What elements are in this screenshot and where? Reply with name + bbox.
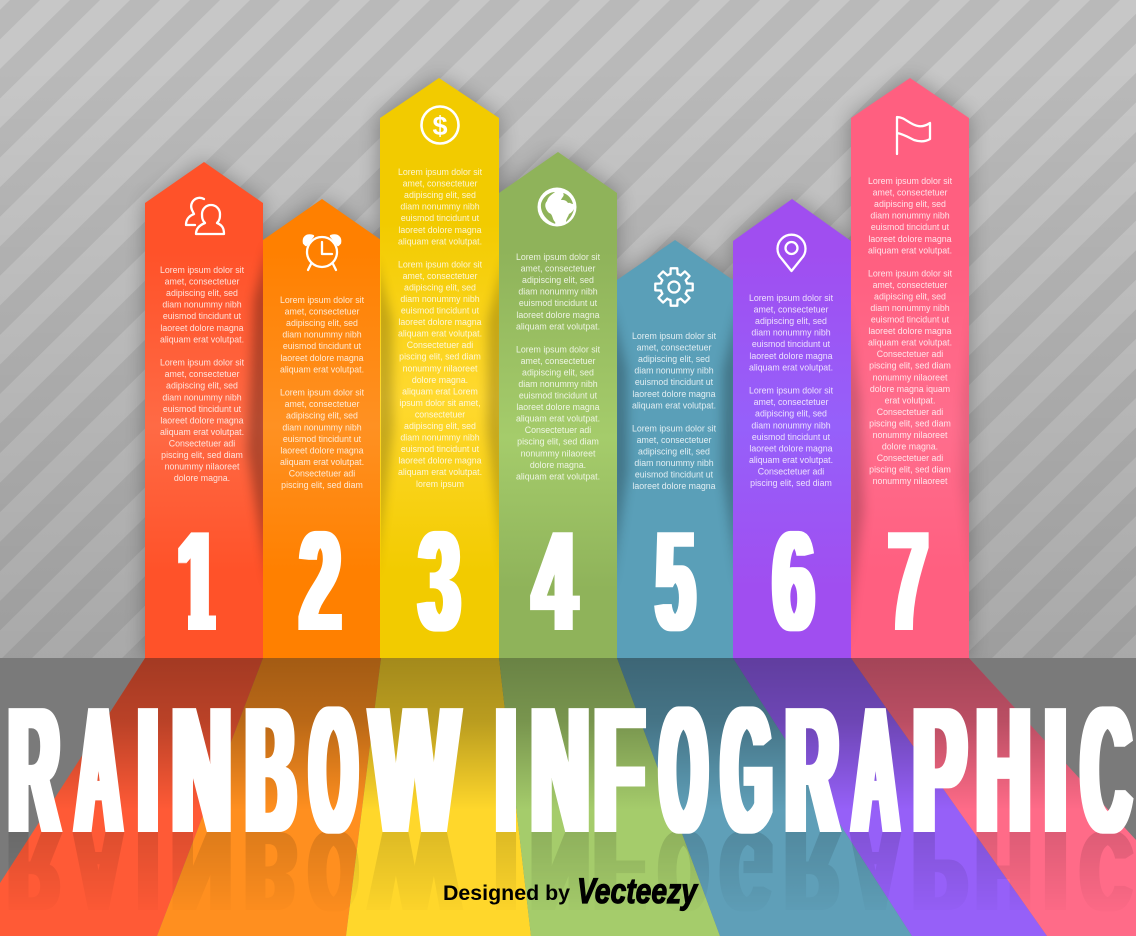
column 6 text: diam nonummy nibh	[751, 420, 831, 430]
column 1 text: aliquam erat volutpat.	[160, 427, 244, 437]
column 7 text: amet, consectetuer	[873, 188, 947, 198]
column 7 text: piscing elit, sed diam	[869, 418, 951, 428]
column 4 text: amet, consectetuer	[521, 356, 595, 366]
icon: flag	[897, 117, 930, 154]
column 6 text: aliquam erat volutpat.	[749, 455, 833, 465]
column 3 text: diam nonummy nibh	[400, 294, 480, 304]
title reflection: N	[172, 808, 231, 935]
striped grey background	[0, 0, 1136, 658]
icon: globe	[538, 188, 576, 226]
column 3 shape	[380, 78, 499, 658]
column 6 text: piscing elit, sed diam	[750, 478, 832, 488]
soft shadow behind columns	[145, 78, 969, 658]
title: H	[977, 670, 1030, 871]
column 6 text: aliquam erat volutpat.	[749, 362, 833, 372]
title: A	[76, 669, 121, 871]
column 1 text: amet, consectetuer	[165, 277, 239, 287]
column 2 text: adipiscing elit, sed	[286, 411, 358, 421]
title reflection: P	[913, 808, 966, 934]
column 5 text: adipiscing elit, sed	[638, 446, 710, 456]
column 7 text: nonummy nilaoreet	[873, 372, 948, 382]
column 1 text: amet, consectetuer	[165, 369, 239, 379]
title: O	[660, 671, 707, 871]
title reflection: G	[722, 807, 772, 934]
title: G	[722, 669, 772, 871]
column 6 text: Lorem ipsum dolor sit	[749, 293, 834, 303]
column 2 text: Lorem ipsum dolor sit	[280, 295, 365, 305]
column 7 text: Lorem ipsum dolor sit	[868, 268, 953, 278]
title reflection: A	[853, 807, 898, 934]
column 4 text: aliquam erat volutpat.	[516, 471, 600, 481]
credit line: Vecteezy	[577, 872, 698, 911]
column 3 text: euismod tincidunt ut	[401, 306, 480, 316]
title: O	[310, 671, 357, 871]
column 1 side shadow	[241, 250, 263, 574]
column 7: pink	[845, 78, 975, 658]
column numbers 1 to 7	[178, 530, 929, 632]
column 4 text: adipiscing elit, sed	[522, 367, 594, 377]
column numbers 1 to 7: 1	[177, 503, 219, 661]
column 7 text: Consectetuer adi	[877, 453, 943, 463]
column 1 text: dolore magna.	[174, 473, 230, 483]
column 2 text: Lorem ipsum dolor sit	[280, 388, 365, 398]
column 3 text: adipiscing elit, sed	[404, 282, 476, 292]
column 1 text: adipiscing elit, sed	[166, 381, 238, 391]
column 1 text: nonummy nilaoreet	[165, 462, 240, 472]
column 3 text: aliquam erat volutpat.	[398, 236, 482, 246]
column 1 text: aliquam erat volutpat.	[160, 334, 244, 344]
title reflection: F	[594, 808, 644, 935]
column 7 text: adipiscing elit, sed	[874, 291, 946, 301]
column 3 text: consectetuer	[415, 409, 465, 419]
column 5 text: diam nonummy nibh	[634, 366, 714, 376]
column 2 text: amet, consectetuer	[285, 399, 359, 409]
title reflection: C	[1082, 808, 1130, 934]
title reflection: A	[76, 807, 121, 934]
title reflection: I	[138, 808, 158, 934]
column numbers 1 to 7: 4	[533, 502, 577, 661]
column 2 text: euismod tincidunt ut	[283, 341, 362, 351]
title: I	[496, 669, 516, 870]
column 1 shape	[145, 162, 263, 658]
rainbow beams	[0, 658, 1136, 936]
column 3 text: aliquam erat Lorem	[402, 386, 478, 396]
column 7 text: dolore magna iquam	[870, 384, 950, 394]
column 5 text: adipiscing elit, sed	[638, 354, 710, 364]
column numbers 1 to 7: 2	[300, 502, 341, 660]
column 4 text: diam nonummy nibh	[518, 287, 598, 297]
column 5 text: Lorem ipsum dolor sit	[632, 331, 717, 341]
column 3 text: adipiscing elit, sed	[404, 190, 476, 200]
column 5: blue	[617, 240, 733, 658]
column 7 text: piscing elit, sed diam	[869, 465, 951, 475]
column 3 text: adipiscing elit, sed	[404, 421, 476, 431]
column 5 text: amet, consectetuer	[637, 343, 711, 353]
column 4 text: amet, consectetuer	[521, 264, 595, 274]
icon: people	[186, 198, 224, 234]
column 6 text: adipiscing elit, sed	[755, 316, 827, 326]
column 3 text: diam nonummy nibh	[400, 433, 480, 443]
column 3 side shadows	[381, 267, 499, 552]
column 6 text: adipiscing elit, sed	[755, 409, 827, 419]
column 6 text: Consectetuer adi	[758, 466, 824, 476]
icon: dollar coin: $	[432, 111, 448, 141]
column 4 text: piscing elit, sed diam	[517, 437, 599, 447]
column 6 shape	[733, 199, 851, 658]
column 3 text: nonummy nilaoreet	[403, 363, 478, 373]
column 4 text: euismod tincidunt ut	[519, 298, 598, 308]
title reflection: I	[496, 808, 516, 934]
column 2 text: aliquam erat volutpat.	[280, 364, 364, 374]
column numbers 1 to 7: 6	[773, 502, 814, 660]
column 5 text: laoreet dolore magna	[632, 389, 716, 399]
column 7 text: euismod tincidunt ut	[871, 314, 950, 324]
column 7 text: laoreet dolore magna	[868, 234, 952, 244]
column 7 text: nonummy nilaoreet	[873, 476, 948, 486]
column 3 text: diam nonummy nibh	[400, 202, 480, 212]
title: F	[594, 669, 644, 871]
title	[9, 668, 1130, 871]
title: A	[853, 669, 898, 871]
column 2 text: adipiscing elit, sed	[286, 318, 358, 328]
column 3 text: laoreet dolore magna	[398, 456, 482, 466]
floor	[0, 658, 1136, 936]
column 4 text: euismod tincidunt ut	[519, 390, 598, 400]
column 3 text: euismod tincidunt ut	[401, 213, 480, 223]
column 1: red	[145, 162, 270, 658]
column 5 text: euismod tincidunt ut	[635, 470, 714, 480]
column 7 text: dolore magna.	[882, 442, 938, 452]
column 3 text: amet, consectetuer	[403, 179, 477, 189]
column 4 text: dolore magna.	[530, 460, 586, 470]
title: B	[246, 669, 295, 870]
column 2 shape	[263, 199, 381, 658]
column 7 text: diam nonummy nibh	[870, 211, 950, 221]
column 1 text: euismod tincidunt ut	[163, 404, 242, 414]
column 7 side shadows	[851, 322, 969, 626]
column 4 text: aliquam erat volutpat.	[516, 414, 600, 424]
credit line: Designed by	[443, 882, 570, 905]
column 6 text: laoreet dolore magna	[749, 351, 833, 361]
column 7 text: adipiscing elit, sed	[874, 199, 946, 209]
column 7 shape	[851, 78, 969, 658]
column 2 text: diam nonummy nibh	[282, 422, 362, 432]
column 1 text: adipiscing elit, sed	[166, 288, 238, 298]
column 4 shape	[499, 152, 617, 658]
column 4 text: adipiscing elit, sed	[522, 275, 594, 285]
column 1 text: laoreet dolore magna	[160, 415, 244, 425]
title: N	[172, 669, 231, 871]
column 2 text: laoreet dolore magna	[280, 445, 364, 455]
column 4 text: nonummy nilaoreet	[521, 448, 596, 458]
column 4 text: Consectetuer adi	[525, 425, 591, 435]
column 6 text: diam nonummy nibh	[751, 328, 831, 338]
column 1 text: diam nonummy nibh	[162, 300, 242, 310]
title: N	[531, 669, 589, 871]
title reflection: R	[9, 808, 59, 934]
column 3 text: lorem ipsum	[416, 479, 464, 489]
column 4 text: laoreet dolore magna	[516, 310, 600, 320]
column 7 text: Consectetuer adi	[877, 407, 943, 417]
icon: map pin	[778, 235, 806, 271]
credit line	[443, 872, 698, 911]
column 2 text: amet, consectetuer	[285, 307, 359, 317]
column 7 text: Consectetuer adi	[877, 349, 943, 359]
title reflection: N	[531, 808, 589, 935]
column 3 text: aliquam erat volutpat.	[398, 329, 482, 339]
column 2: orange	[263, 199, 381, 658]
column 1 text: Consectetuer adi	[169, 438, 235, 448]
column 4 text: aliquam erat volutpat.	[516, 321, 600, 331]
column 1 text: laoreet dolore magna	[160, 323, 244, 333]
column 7 text: piscing elit, sed diam	[869, 361, 951, 371]
column 5 text: Lorem ipsum dolor sit	[632, 423, 717, 433]
title reflection: O	[660, 807, 707, 933]
column 5 text: diam nonummy nibh	[634, 458, 714, 468]
column 6 text: euismod tincidunt ut	[752, 339, 831, 349]
column 3 text: amet, consectetuer	[403, 271, 477, 281]
column 7 text: nonummy nilaoreet	[873, 430, 948, 440]
column 6 text: laoreet dolore magna	[749, 443, 833, 453]
column 5 side shadows	[617, 316, 733, 565]
column 1 text: diam nonummy nibh	[162, 392, 242, 402]
floor shading	[0, 658, 1136, 936]
column 1 text: Lorem ipsum dolor sit	[160, 358, 245, 368]
title: C	[1082, 669, 1130, 870]
column numbers 1 to 7: 7	[889, 502, 928, 660]
column 7 text: euismod tincidunt ut	[871, 222, 950, 232]
column 2 text: laoreet dolore magna	[280, 353, 364, 363]
column 3 text: dolore magna.	[412, 375, 468, 385]
column 3 text: laoreet dolore magna	[398, 225, 482, 235]
column 4 text: Lorem ipsum dolor sit	[516, 252, 601, 262]
column 7 text: diam nonummy nibh	[870, 303, 950, 313]
title reflection: H	[977, 807, 1030, 934]
column 2 text: Consectetuer adi	[289, 468, 355, 478]
column 7 text: amet, consectetuer	[873, 280, 947, 290]
column 2 text: diam nonummy nibh	[282, 330, 362, 340]
column 3: yellow	[374, 78, 506, 658]
column 2 text: aliquam erat volutpat.	[280, 457, 364, 467]
column 3 text: Consectetuer adi	[407, 340, 473, 350]
column 6: purple	[733, 199, 851, 658]
title reflection: B	[246, 808, 295, 935]
column 5 text: euismod tincidunt ut	[635, 377, 714, 387]
column 4: green	[499, 152, 617, 658]
title reflection: R	[786, 807, 838, 933]
title: W	[371, 670, 458, 871]
column 3 text: aliquam erat volutpat.	[398, 467, 482, 477]
column 7 text: Lorem ipsum dolor sit	[868, 176, 953, 186]
column 6 text: amet, consectetuer	[754, 305, 828, 315]
column 1 text: piscing elit, sed diam	[161, 450, 243, 460]
column 5 text: aliquam erat volutpat.	[632, 400, 716, 410]
column 6 text: amet, consectetuer	[754, 397, 828, 407]
column 4 text: diam nonummy nibh	[518, 379, 598, 389]
column numbers 1 to 7: 5	[656, 502, 695, 660]
title reflection: O	[310, 807, 357, 933]
column 4 text: Lorem ipsum dolor sit	[516, 344, 601, 354]
title: R	[786, 671, 838, 871]
icon: gear	[655, 268, 693, 306]
column 5 text: laoreet dolore magna	[632, 481, 716, 491]
column 3 text: ipsum dolor sit amet,	[399, 398, 481, 408]
column 2 text: piscing elit, sed diam	[281, 480, 363, 490]
column 4 text: laoreet dolore magna	[516, 402, 600, 412]
title reflection: W	[371, 808, 459, 935]
title: R	[9, 668, 59, 870]
column numbers 1 to 7: 3	[419, 502, 460, 660]
title: I	[138, 669, 158, 870]
title: P	[913, 670, 966, 871]
column 7 text: aliquam erat volutpat.	[868, 245, 952, 255]
column 3 text: piscing elit, sed diam	[399, 352, 481, 362]
column 6 text: euismod tincidunt ut	[752, 432, 831, 442]
column 1 text: euismod tincidunt ut	[163, 311, 242, 321]
icon: dollar coin	[422, 106, 458, 144]
column 1 text: Lorem ipsum dolor sit	[160, 265, 245, 275]
column 6 text: Lorem ipsum dolor sit	[749, 386, 834, 396]
column 3 text: laoreet dolore magna	[398, 317, 482, 327]
column 5 shape	[617, 240, 733, 658]
title reflection: I	[1045, 807, 1066, 935]
title: I	[1045, 671, 1066, 871]
icon: alarm clock	[304, 235, 340, 270]
column 3 text: Lorem ipsum dolor sit	[398, 259, 483, 269]
column 5 text: amet, consectetuer	[637, 435, 711, 445]
column 7 text: aliquam erat volutpat.	[868, 338, 952, 348]
column 7 text: erat volutpat.	[885, 395, 935, 405]
title reflection	[8, 832, 1134, 896]
column 3 text: Lorem ipsum dolor sit	[398, 167, 483, 177]
column 2 text: euismod tincidunt ut	[283, 434, 362, 444]
column 7 text: laoreet dolore magna	[868, 326, 952, 336]
column 3 text: euismod tincidunt ut	[401, 444, 480, 454]
